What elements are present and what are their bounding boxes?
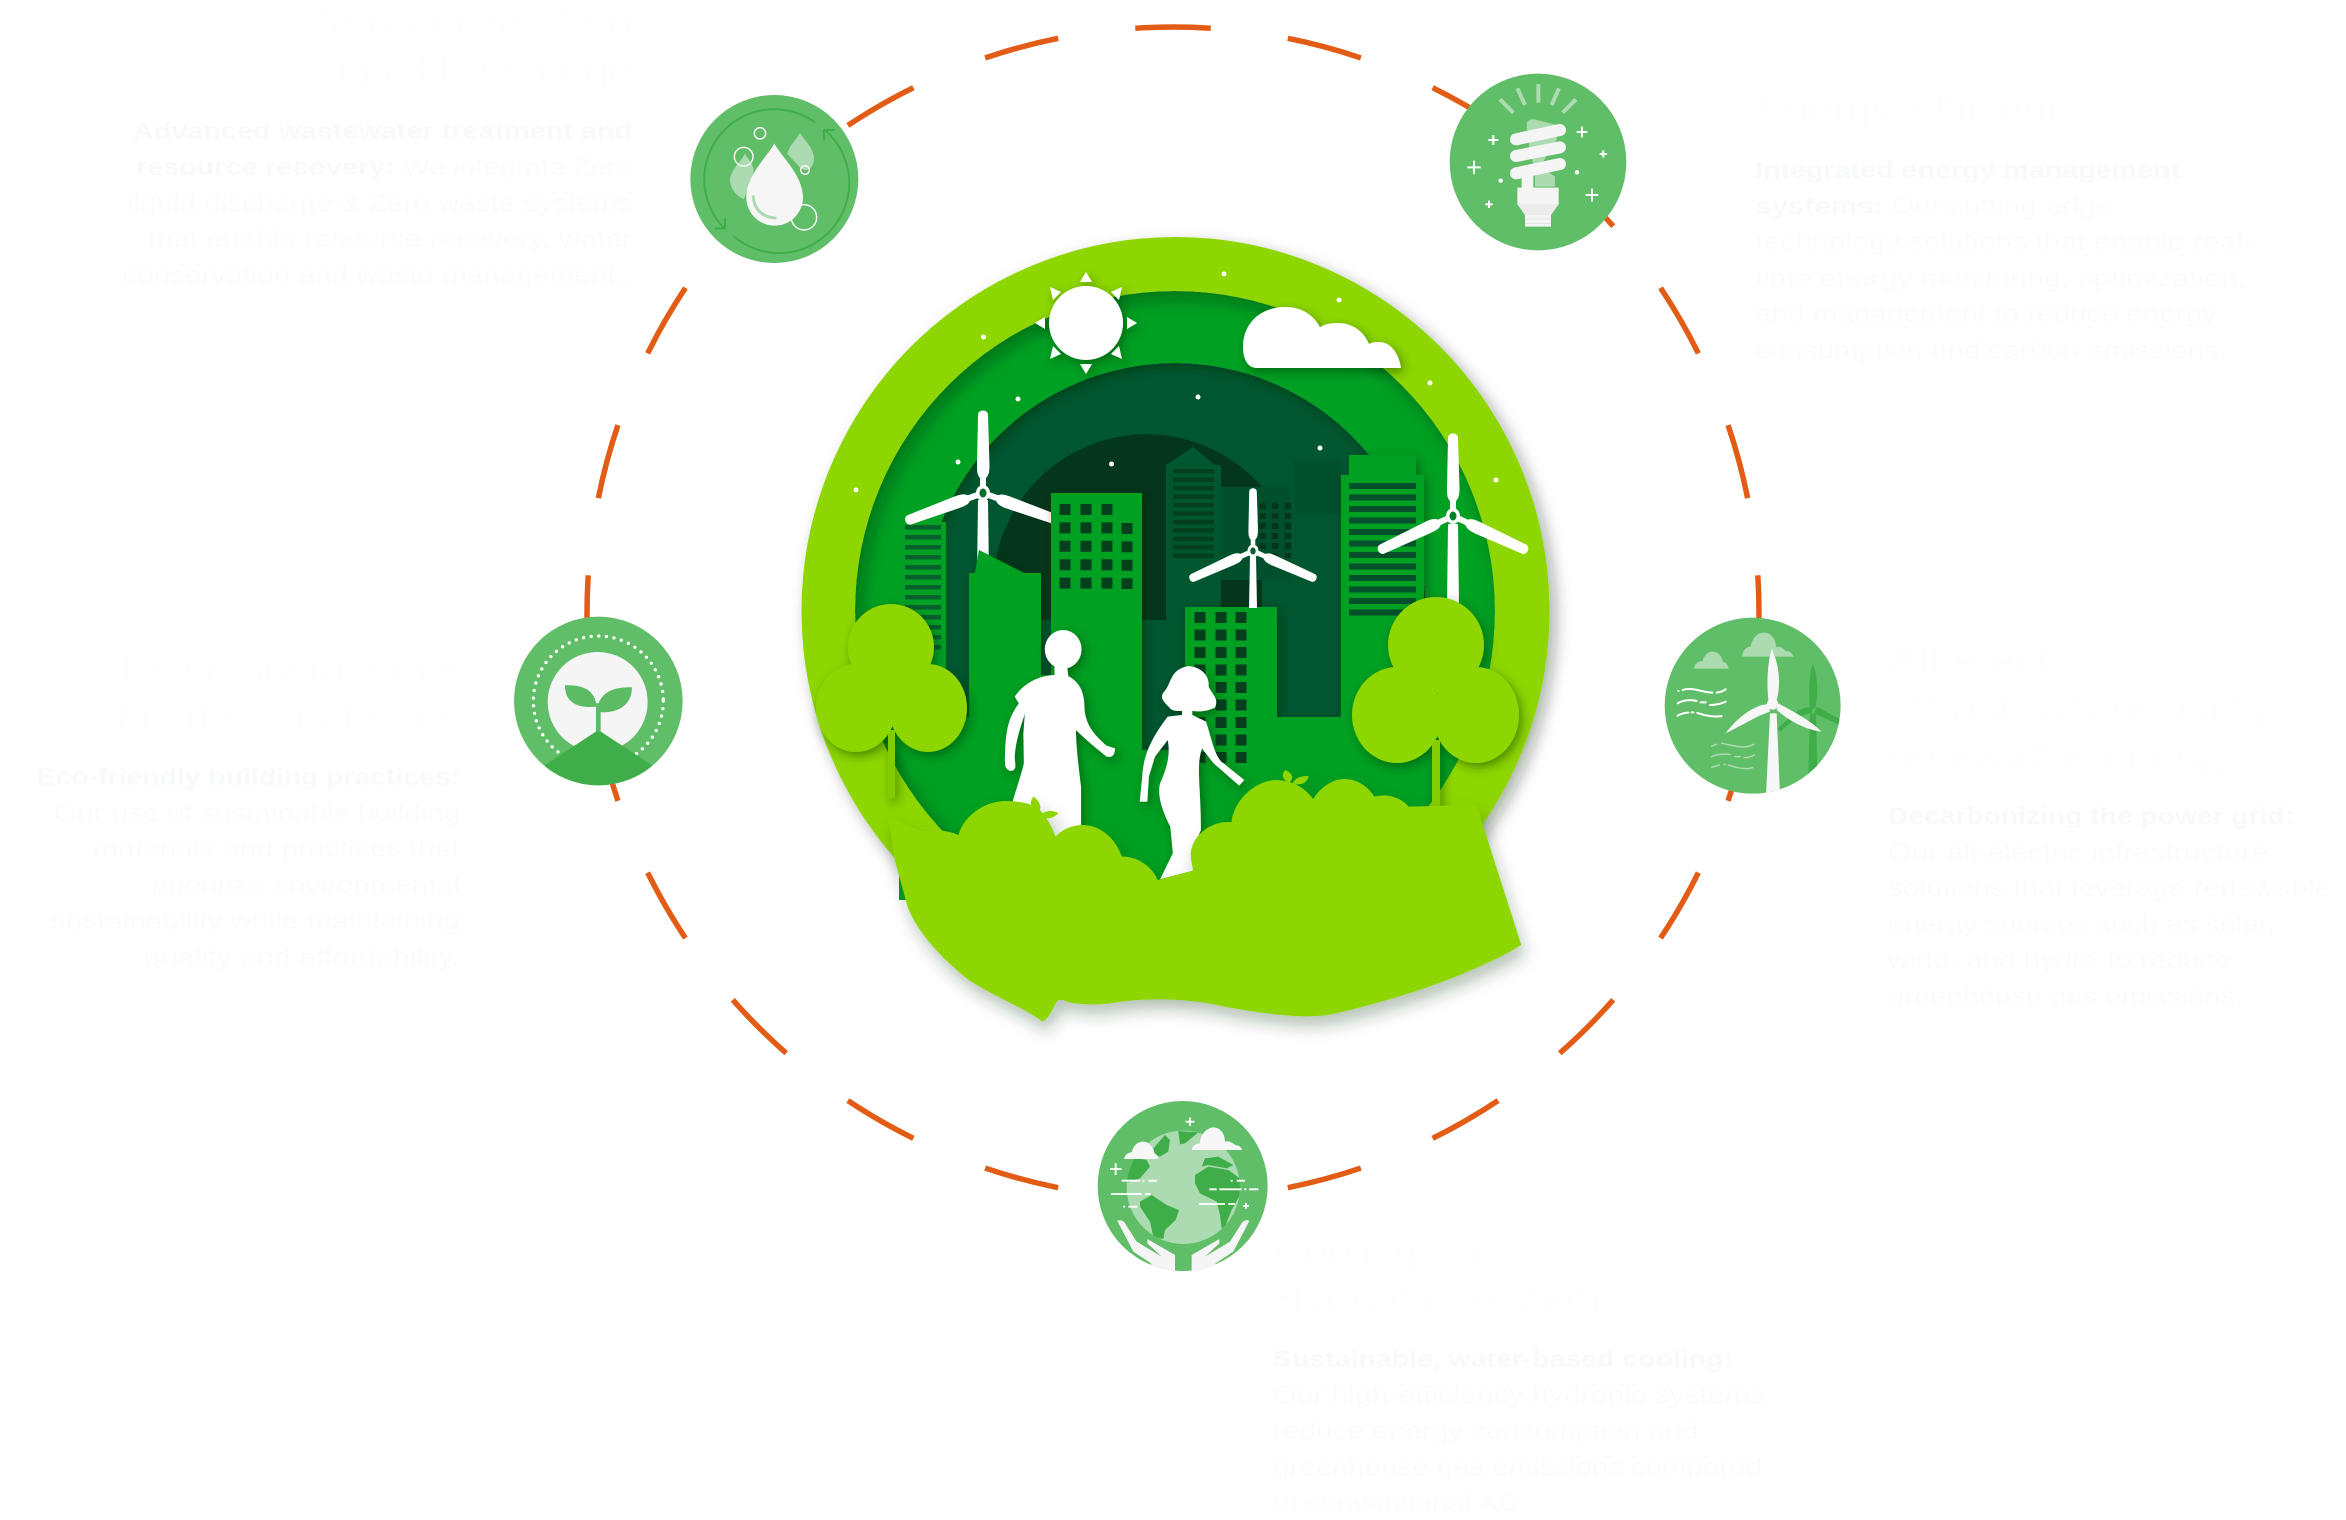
text block: Energy Efficiency: and management to reduce energy <box>1755 301 2217 328</box>
pale inner tube <box>1527 119 1557 187</box>
woman silhouette <box>1140 666 1244 879</box>
text block: Using sustainable building materials: Eco-friendly building practices: <box>37 764 460 791</box>
lime outer ring <box>802 237 1550 985</box>
hands <box>1117 1220 1249 1275</box>
text block: Cooling via Hydronic Systems: Sustainable, water-based cooling: <box>1273 1346 1733 1373</box>
text block: Energy Efficiency: Energy Efficiency <box>1755 88 2091 132</box>
sparkles <box>1467 127 1607 208</box>
rays <box>1500 84 1576 113</box>
text block: Using sustainable building materials: Our use of sustainable building <box>54 800 460 827</box>
text block: Cooling via Hydronic Systems: Our high-efficiency hydronic systems <box>1273 1382 1765 1409</box>
left tree <box>816 604 967 798</box>
windows of centre building <box>1065 504 1127 589</box>
back right building <box>1221 460 1341 580</box>
green building corner <box>899 860 910 900</box>
text block: Using sustainable building materials: sustainability while maintaining <box>51 908 460 935</box>
small pale drops <box>787 133 814 170</box>
stars <box>854 272 1498 492</box>
grass and bushes <box>888 770 1521 1022</box>
text block: Cooling via Hydronic Systems: Hydronic Systems <box>1273 1277 1623 1321</box>
text block: Cooling via Hydronic Systems <box>1273 1230 1765 1517</box>
text block: All-electric infrastructure: Infrastructure using <box>1888 685 2268 729</box>
text block: Zero Waste, Zero Liquid Discharge: Liquid Discharge <box>313 49 632 93</box>
icon: sprout <box>514 616 683 786</box>
text block: Zero Waste, Zero Liquid Discharge: resource recovery: We integrate Zero <box>136 154 632 181</box>
text block: Cooling via Hydronic Systems: greenhouse gas emissions compared <box>1273 1454 1762 1481</box>
wind lines <box>1678 689 1726 717</box>
icon: water drop <box>690 95 858 263</box>
earth <box>1127 1131 1240 1244</box>
back tower <box>1166 447 1221 750</box>
text block: Zero Waste, Zero Liquid Discharge: Advanced wastewater treatment and <box>133 118 632 145</box>
air lines and sparkles <box>1110 1117 1258 1209</box>
left wind turbine <box>903 410 1063 575</box>
text block: Using sustainable building materials: building materials <box>117 696 460 740</box>
front turbine <box>1726 649 1822 795</box>
mound <box>544 732 652 786</box>
dark inner layer <box>924 363 1426 865</box>
bulb base <box>1517 175 1559 215</box>
right wind turbine <box>1375 434 1530 606</box>
text block: Using sustainable building materials: Using sustainable <box>120 648 460 692</box>
text block: Zero Waste, Zero Liquid Discharge: that enable resource recovery, water <box>148 226 632 253</box>
deepest arch <box>993 434 1262 620</box>
text block: Energy Efficiency: time energy monitoring, optimization, <box>1755 265 2246 292</box>
text block: Using sustainable building materials: quality and affordability. <box>144 944 460 971</box>
continents <box>1122 1131 1240 1239</box>
text block: All-electric infrastructure: Decarbonizing the power grid: <box>1888 803 2294 830</box>
text block: Cooling via Hydronic Systems: to conventional AC. <box>1273 1490 1527 1517</box>
text block: Zero Waste, Zero Liquid Discharge: Zero Waste, Zero <box>304 1 632 45</box>
text block: Zero Waste, Zero Liquid Discharge: conservation and waste management.. <box>122 262 632 289</box>
recycling arrows <box>704 109 849 253</box>
text block: Cooling via Hydronic Systems: reduce energy consumption and <box>1273 1418 1698 1445</box>
text block: All-electric infrastructure: energy sources such as solar, <box>1888 911 2275 938</box>
bubbles <box>734 128 817 230</box>
text block: All-electric infrastructure: solutions that leverage renewable <box>1888 875 2331 902</box>
icon: wind turbine <box>1665 618 1842 795</box>
text block: Using sustainable building materials: prioritize environmental <box>151 872 460 899</box>
sprout stem and leaves <box>565 685 632 732</box>
text block: All-electric infrastructure: wind, and hydro to reduce <box>1887 947 2231 974</box>
text block: All-electric infrastructure: greenhouse gas emissions. <box>1888 983 2243 1010</box>
right tree <box>1352 597 1519 810</box>
coil <box>1516 130 1560 173</box>
text block: All-electric infrastructure: Our all-electric infrastructure <box>1888 839 2268 866</box>
icon: light bulb <box>1450 74 1626 250</box>
middle green ring <box>855 291 1495 931</box>
text block: Using sustainable building materials: materials and practices that <box>93 836 460 863</box>
text block: Energy Efficiency: consumption and carbon emissions. <box>1755 337 2227 364</box>
text block: All-electric infrastructure: renewable Energy <box>1888 733 2234 777</box>
icon: globe in hands <box>1098 1101 1268 1275</box>
text block: Using sustainable building materials <box>37 648 460 971</box>
text block: Zero Waste, Zero Liquid Discharge: liquid discharge & Zero waste systems <box>127 190 632 217</box>
central paper-cut city illustration <box>802 237 1550 1022</box>
text block: Energy Efficiency: Integrated energy management <box>1755 157 2180 184</box>
sun <box>1035 272 1137 374</box>
windows of lower building <box>1200 612 1241 763</box>
left striped building <box>903 522 946 752</box>
text block: Energy Efficiency: technology solutions that enable real- <box>1755 229 2253 256</box>
background turbine <box>1777 663 1842 773</box>
text block: All-electric infrastructure: All-electric <box>1888 638 2098 682</box>
foreground buildings and ground <box>882 453 1459 865</box>
man silhouette <box>1005 630 1115 837</box>
pale clouds <box>1742 633 1793 657</box>
clouds <box>1192 1127 1242 1150</box>
text block: Energy Efficiency <box>1755 88 2253 364</box>
text block: Zero Waste, Zero Liquid Discharge <box>122 1 632 289</box>
stripes of right building <box>1349 483 1416 621</box>
text block: Cooling via Hydronic Systems: Cooling via <box>1273 1230 1485 1274</box>
middle wind turbine <box>1187 488 1318 608</box>
dashed orange ring <box>587 27 1759 1199</box>
cloud <box>1243 307 1401 368</box>
text block: All-electric infrastructure <box>1887 638 2331 1010</box>
text block: Energy Efficiency: systems: Our cutting-edge <box>1755 193 2112 220</box>
main drop <box>746 143 803 226</box>
